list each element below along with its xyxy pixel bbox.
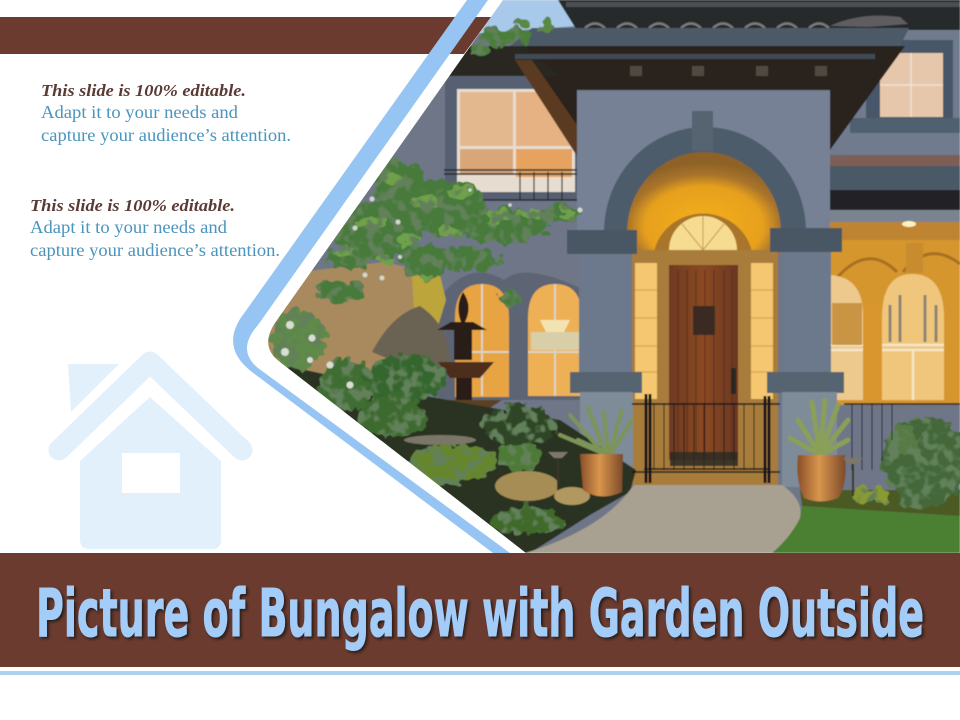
left upper window bbox=[444, 75, 577, 200]
left column bbox=[567, 230, 642, 482]
house photo bbox=[250, 0, 960, 553]
tan stucco wall bbox=[268, 262, 420, 374]
doormat bbox=[670, 452, 738, 466]
right porch windows bbox=[830, 274, 944, 400]
entry surround bbox=[632, 250, 778, 485]
left planter bbox=[560, 408, 632, 497]
right lower roof and porch bbox=[826, 155, 960, 405]
main arch bbox=[604, 111, 806, 254]
low ferns by fountain bbox=[482, 405, 558, 445]
edge bed right bbox=[800, 490, 960, 516]
rock top bbox=[404, 435, 476, 445]
fountain bbox=[438, 292, 502, 408]
bottom title band bbox=[0, 553, 960, 667]
light text block one: This slide is 100% editable. bbox=[41, 81, 246, 100]
soffit and gutter of main roof bbox=[447, 28, 909, 156]
stone path bbox=[525, 485, 801, 553]
light text block one: Adapt it to your needs and bbox=[41, 102, 238, 122]
shrub blossoms bbox=[281, 321, 354, 388]
garden bed bbox=[260, 360, 636, 553]
lawn bbox=[772, 506, 960, 553]
right upper wing bbox=[850, 29, 960, 134]
light text block two: This slide is 100% editable. bbox=[30, 196, 235, 215]
tree foliage bbox=[318, 161, 582, 305]
light text block two bbox=[30, 196, 280, 260]
light text block one: capture your audience’s attention. bbox=[41, 125, 291, 145]
tree blossoms bbox=[352, 188, 582, 280]
right bush bbox=[850, 416, 960, 508]
vine at eave bbox=[472, 16, 552, 56]
bottom light-blue rule bbox=[0, 671, 960, 675]
icon: house watermark bbox=[59, 362, 242, 549]
blue diagonal frame stripe bbox=[233, 0, 510, 553]
wall shadow of tree bbox=[372, 306, 450, 372]
stones bbox=[495, 471, 590, 505]
yellow lit wall bbox=[412, 275, 446, 330]
left shrubs and flowers bbox=[270, 310, 447, 438]
inner fanlight arch bbox=[654, 214, 752, 252]
light text block one bbox=[41, 81, 291, 145]
light text block two: capture your audience’s attention. bbox=[30, 240, 280, 260]
upper roof bbox=[558, 0, 960, 32]
left wing arched windows bbox=[438, 272, 582, 400]
right column bbox=[767, 228, 844, 487]
sky bbox=[479, 0, 575, 34]
top brown bar bbox=[0, 17, 491, 54]
photo base wall bbox=[312, 26, 960, 550]
sidelights bbox=[635, 263, 773, 399]
front door bbox=[669, 265, 738, 460]
central gable wall bbox=[577, 91, 830, 241]
mossy rock bbox=[408, 441, 542, 484]
iron fence bbox=[632, 394, 960, 483]
light text block two: Adapt it to your needs and bbox=[30, 217, 227, 237]
path lights bbox=[548, 452, 863, 496]
right planter bbox=[790, 400, 848, 502]
ground cover bbox=[492, 506, 564, 534]
